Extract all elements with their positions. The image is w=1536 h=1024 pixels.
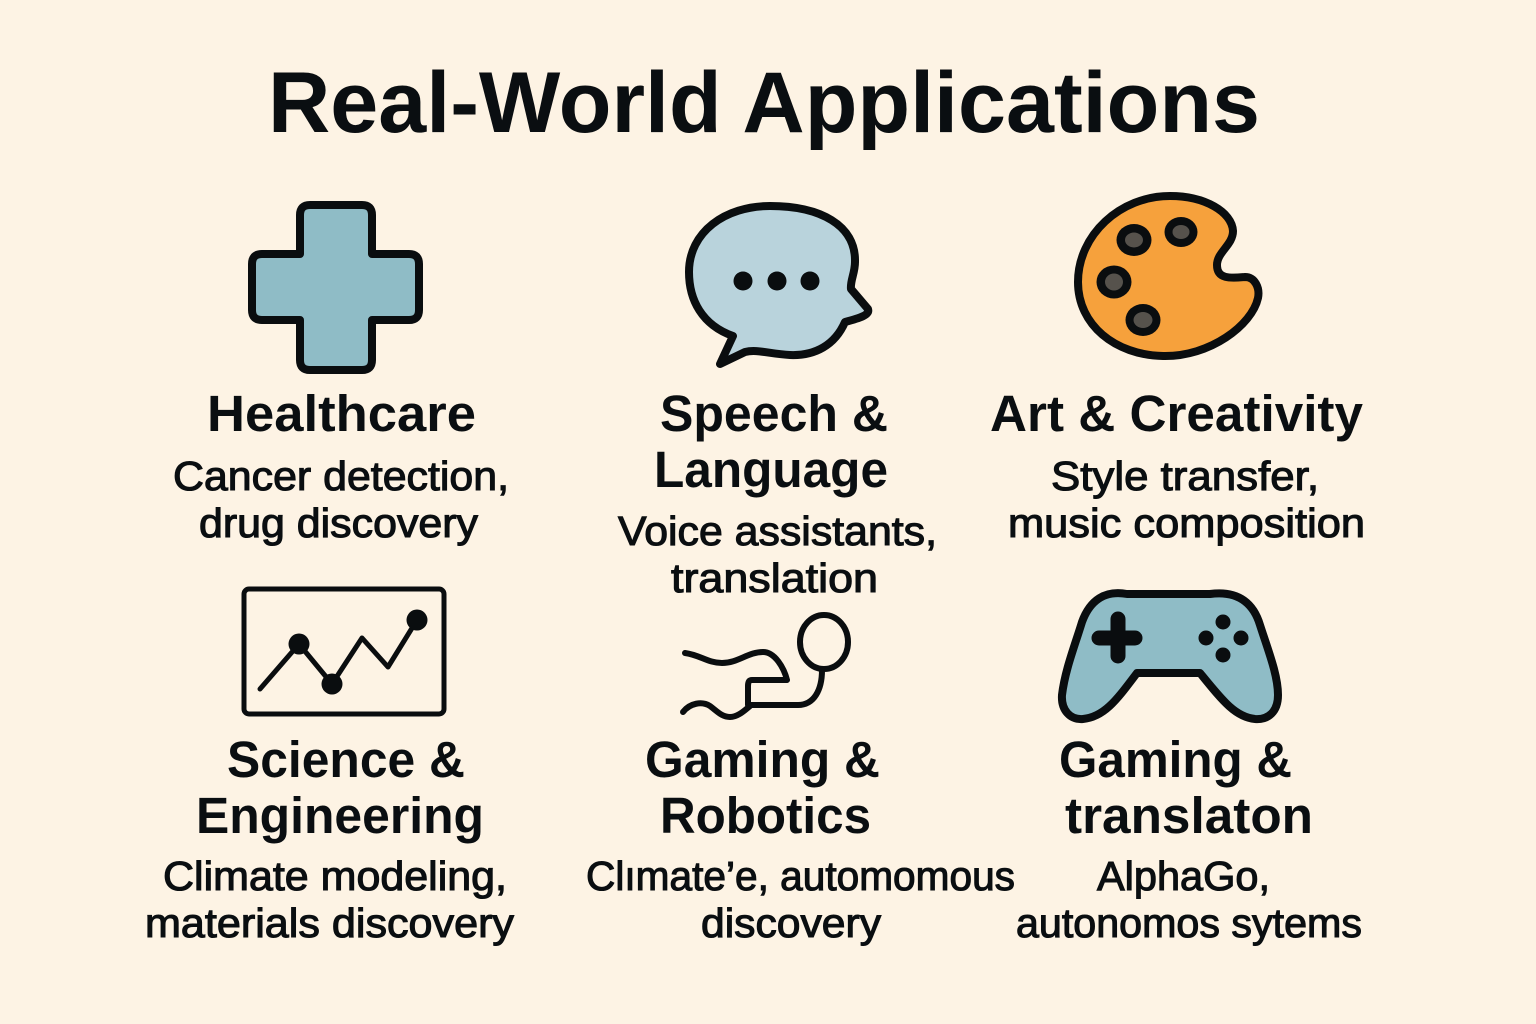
description: speech and language <box>618 508 937 601</box>
heading: science and engineering: Engineering <box>196 787 484 844</box>
icon: robot arm squiggle <box>683 615 848 717</box>
heading: gaming and robotics: Robotics <box>660 787 871 844</box>
heading: gaming and translation <box>1059 731 1313 844</box>
panel: science and engineering <box>145 589 515 946</box>
description: healthcare: Cancer detection, <box>173 453 509 499</box>
icon: paint palette <box>1078 196 1258 356</box>
heading: gaming and translation: Gaming & <box>1059 731 1292 788</box>
description: art and creativity <box>1008 453 1365 546</box>
icon: line chart <box>244 589 444 714</box>
panel: speech and language <box>618 206 937 601</box>
heading: gaming and robotics: Gaming & <box>645 731 880 788</box>
heading: speech and language: Language <box>654 441 888 498</box>
heading: speech and language <box>654 385 888 498</box>
description: healthcare: drug discovery <box>199 500 479 546</box>
description: science and engineering: Climate modeling, <box>163 853 507 899</box>
icon: game controller <box>1062 593 1278 719</box>
description: healthcare <box>173 453 509 546</box>
title: Real-World Applications <box>268 55 1260 151</box>
heading: healthcare: Healthcare <box>207 385 476 442</box>
heading: gaming and robotics <box>645 731 880 844</box>
panel: art and creativity <box>990 196 1365 546</box>
heading: science and engineering <box>196 731 484 844</box>
description: gaming and robotics: Clımate’e, automomous <box>586 853 1015 899</box>
description: gaming and translation: AlphaGo, <box>1097 853 1270 899</box>
icon: medical cross <box>252 205 419 370</box>
panel: gaming and robotics <box>586 615 1015 946</box>
heading: art and creativity: Art & Creativity <box>990 385 1364 442</box>
description: gaming and translation: autonomos sytems <box>1016 900 1362 946</box>
description: science and engineering <box>145 853 515 946</box>
description: gaming and robotics: discovery <box>701 900 882 946</box>
icon: speech bubble <box>689 206 868 364</box>
description: speech and language: translation <box>671 555 878 601</box>
panel: healthcare <box>173 205 509 546</box>
description: gaming and robotics <box>586 853 1015 946</box>
heading: speech and language: Speech & <box>660 385 888 442</box>
panel: gaming and translation <box>1016 593 1362 946</box>
heading: science and engineering: Science & <box>227 731 465 788</box>
description: gaming and translation <box>1016 853 1362 946</box>
heading: gaming and translation: translaton <box>1065 787 1313 844</box>
description: speech and language: Voice assistants, <box>618 508 937 554</box>
description: art and creativity: music composition <box>1008 500 1365 546</box>
description: art and creativity: Style transfer, <box>1051 453 1319 499</box>
description: science and engineering: materials discovery <box>145 900 515 946</box>
